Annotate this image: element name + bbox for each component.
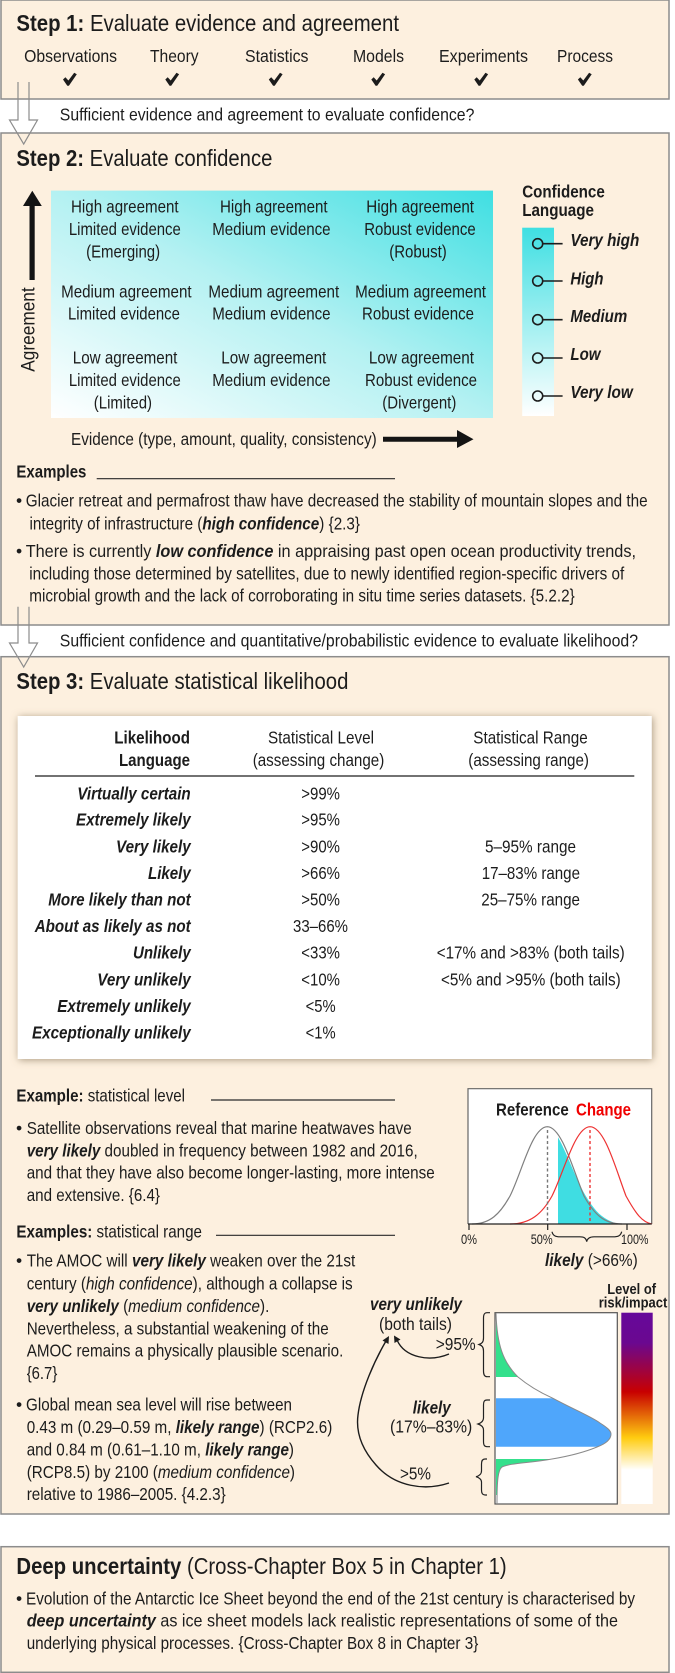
statistical range examples: Nevertheless, a substantial weakening of the — [27, 1318, 329, 1338]
statistical range examples: century (high confidence), although a collapse is — [27, 1273, 353, 1293]
statistical range examples: {6.7} — [27, 1363, 57, 1383]
likelihood table: 33–66% — [293, 916, 348, 936]
likelihood table: 5–95% range — [485, 836, 576, 856]
chart: reference and change distributions: 0% — [461, 1231, 477, 1247]
likelihood table: (assessing change) — [253, 750, 384, 770]
confidence examples: • — [16, 491, 22, 511]
likelihood table: 25–75% range — [481, 889, 580, 909]
deep uncertainty text — [16, 1588, 635, 1653]
chart: reference and change distributions: Reference — [496, 1099, 569, 1119]
likelihood table: About as likely as not — [34, 916, 192, 936]
confidence matrix: Low agreement — [369, 348, 474, 368]
confidence matrix: Medium evidence — [212, 219, 331, 239]
confidence matrix: Medium evidence — [212, 370, 331, 390]
confidence matrix: Low agreement — [73, 348, 177, 368]
braces — [476, 1313, 490, 1495]
confidence matrix: High agreement — [366, 197, 474, 217]
confidence language scale: Language — [522, 200, 594, 220]
confidence examples: • — [16, 541, 22, 561]
statistical range examples: very unlikely (medium confidence). — [27, 1296, 269, 1316]
statistical level example: and extensive. {6.4} — [27, 1185, 160, 1205]
confidence examples: integrity of infrastructure (high confidence) {2.3} — [30, 513, 360, 533]
likelihood table: Likelihood — [114, 727, 190, 747]
confidence matrix: Robust evidence — [362, 304, 474, 324]
chart: risk distribution with tails — [358, 1281, 667, 1504]
confidence matrix: Medium agreement — [208, 281, 339, 301]
statistical range examples: (RCP8.5) by 2100 (medium confidence) — [27, 1462, 295, 1482]
evidence categories with check marks: Statistics — [245, 46, 309, 66]
likelihood table: >90% — [301, 836, 340, 856]
statistical level example: Example: statistical level — [16, 1086, 185, 1106]
likelihood table: <10% — [301, 969, 340, 989]
confidence language scale: Very low — [570, 382, 634, 402]
confidence matrix: Medium agreement — [61, 281, 192, 301]
panel: step 1 — [1, 0, 669, 99]
confidence matrix: Low agreement — [221, 348, 326, 368]
confidence examples — [16, 461, 648, 606]
chart: reference and change distributions: likely (>66%) — [545, 1250, 638, 1270]
evidence categories with check marks: Experiments — [439, 46, 528, 66]
likelihood table: >50% — [301, 889, 340, 909]
arrows to very unlikely — [397, 1340, 449, 1358]
likelihood table: Extremely likely — [76, 810, 192, 830]
statistical range examples: • — [16, 1251, 22, 1271]
deep uncertainty text: underlying physical processes. {Cross-Chapter Box 8 in Chapter 3} — [27, 1633, 478, 1653]
chart: reference and change distributions: Change — [576, 1099, 631, 1119]
likelihood table: Virtually certain — [77, 783, 191, 803]
confidence matrix — [51, 191, 493, 418]
chart: risk distribution with tails: (both tails) — [379, 1314, 452, 1334]
confidence matrix: Limited evidence — [69, 370, 181, 390]
confidence language scale — [522, 181, 640, 416]
likelihood table: >66% — [301, 863, 340, 883]
evidence axis: Evidence (type, amount, quality, consistency) — [71, 429, 377, 449]
likelihood table: Very unlikely — [97, 969, 192, 989]
deep uncertainty heading: Deep uncertainty (Cross-Chapter Box 5 in Chapter 1) — [16, 1553, 507, 1579]
likelihood table: (assessing range) — [468, 750, 589, 770]
confidence language scale: Very high — [570, 230, 640, 250]
likelihood table: Likely — [148, 863, 192, 883]
confidence matrix: (Limited) — [94, 392, 152, 412]
statistical range examples: Global mean sea level will rise between — [26, 1395, 292, 1415]
chart: risk distribution with tails: (17%–83%) — [390, 1416, 472, 1436]
likelihood table: Very likely — [116, 836, 192, 856]
likelihood table: >99% — [301, 783, 340, 803]
statistical range examples: Examples: statistical range — [16, 1221, 202, 1241]
reference curve — [472, 1127, 622, 1224]
confidence examples: Examples — [16, 461, 87, 481]
statistical range examples: AMOC remains a physically plausible scenario. — [27, 1341, 343, 1361]
step 2 heading: Step 2: Evaluate confidence — [16, 145, 272, 171]
step 3 heading: Step 3: Evaluate statistical likelihood — [16, 668, 348, 694]
confidence matrix: (Emerging) — [86, 241, 160, 261]
confidence language scale: Confidence — [522, 181, 605, 201]
chart: risk distribution with tails: likely — [413, 1397, 452, 1417]
chart: reference and change distributions: 100% — [621, 1231, 648, 1247]
confidence matrix: High agreement — [220, 197, 328, 217]
likelihood table: More likely than not — [48, 889, 192, 909]
agreement axis — [18, 191, 42, 372]
statistical level example: and that they have also become longer-lasting, more intense — [27, 1163, 435, 1183]
likelihood table: Statistical Level — [268, 727, 374, 747]
confidence examples: There is currently low confidence in appraising past open ocean productivity trends, — [26, 541, 636, 561]
confidence matrix: High agreement — [71, 197, 179, 217]
likelihood table: <17% and >83% (both tails) — [437, 943, 625, 963]
tail and range labels: very unlikely — [370, 1294, 463, 1314]
arrow: step 1 to step 2 — [10, 82, 38, 144]
statistical level example: • — [16, 1118, 22, 1138]
likelihood table: <33% — [301, 943, 340, 963]
likelihood table: Extremely unlikely — [57, 996, 192, 1016]
chart: reference and change distributions: 50% — [531, 1231, 553, 1247]
shaded likelihood area — [558, 1137, 618, 1224]
chart: risk distribution with tails: >95% — [436, 1334, 476, 1354]
deep uncertainty text: deep uncertainty as ice sheet models lack realistic representations of some of the — [27, 1611, 618, 1631]
likelihood table: Language — [119, 750, 190, 770]
chart: risk distribution with tails: Level of — [607, 1281, 657, 1298]
statistical range examples: • — [16, 1395, 22, 1415]
panel: step 2 — [1, 133, 669, 625]
confidence language scale: High — [570, 268, 604, 288]
likelihood table: >95% — [301, 810, 340, 830]
statistical level example — [16, 1086, 435, 1205]
confidence matrix: Medium agreement — [355, 281, 486, 301]
confidence matrix: Medium evidence — [212, 304, 331, 324]
arrow: step 2 to step 3 — [10, 607, 38, 667]
evidence categories with check marks: Observations — [24, 46, 117, 66]
confidence matrix: Limited evidence — [68, 304, 180, 324]
evidence categories with check marks: Process — [557, 46, 613, 66]
likelihood table — [18, 716, 652, 1059]
confidence matrix: (Divergent) — [382, 392, 456, 412]
statistical range examples: relative to 1986–2005. {4.2.3} — [27, 1484, 226, 1504]
statistical level example: Satellite observations reveal that marine heatwaves have — [27, 1118, 412, 1138]
chart: reference and change distributions — [461, 1089, 652, 1270]
confidence matrix: Limited evidence — [69, 219, 181, 239]
panel: deep uncertainty — [1, 1547, 669, 1672]
deep uncertainty text: • — [16, 1588, 22, 1608]
likelihood table: Statistical Range — [473, 727, 588, 747]
confidence matrix: Robust evidence — [364, 219, 476, 239]
likelihood table: 17–83% range — [482, 863, 580, 883]
change curve — [510, 1127, 652, 1224]
likelihood table: <5% and >95% (both tails) — [441, 969, 621, 989]
chart: risk distribution with tails: >5% — [400, 1463, 431, 1483]
axis — [468, 1224, 652, 1230]
question: evidence to confidence: Sufficient evidence and agreement to evaluate confidence? — [60, 105, 475, 125]
likelihood table: Exceptionally unlikely — [32, 1023, 192, 1043]
confidence matrix: Robust evidence — [365, 370, 477, 390]
confidence language scale: Medium — [570, 306, 627, 326]
statistical range examples: The AMOC will very likely weaken over the 21st — [27, 1251, 355, 1271]
statistical level example: very likely doubled in frequency between 1982 and 2016, — [27, 1141, 418, 1161]
panel: step 3 — [1, 657, 669, 1514]
risk colour bar — [621, 1313, 653, 1504]
confidence examples: microbial growth and the lack of corroborating in situ time series datasets. {5.2.2} — [29, 586, 575, 606]
likelihood table: <5% — [306, 996, 336, 1016]
statistical range examples: 0.43 m (0.29–0.59 m, likely range) (RCP2.6) — [27, 1417, 332, 1437]
statistical range examples — [16, 1221, 395, 1504]
likelihood table: <1% — [306, 1023, 336, 1043]
evidence categories with check marks: Models — [353, 46, 404, 66]
confidence matrix: (Robust) — [389, 241, 447, 261]
statistical range examples: and 0.84 m (0.61–1.10 m, likely range) — [27, 1440, 294, 1460]
confidence language scale: Low — [570, 344, 602, 364]
agreement axis: Agreement — [18, 287, 40, 372]
step 1 heading: Step 1: Evaluate evidence and agreement — [16, 10, 400, 36]
likelihood table: Unlikely — [133, 943, 192, 963]
evidence categories with check marks — [24, 46, 613, 86]
evidence categories with check marks: Theory — [150, 46, 199, 66]
